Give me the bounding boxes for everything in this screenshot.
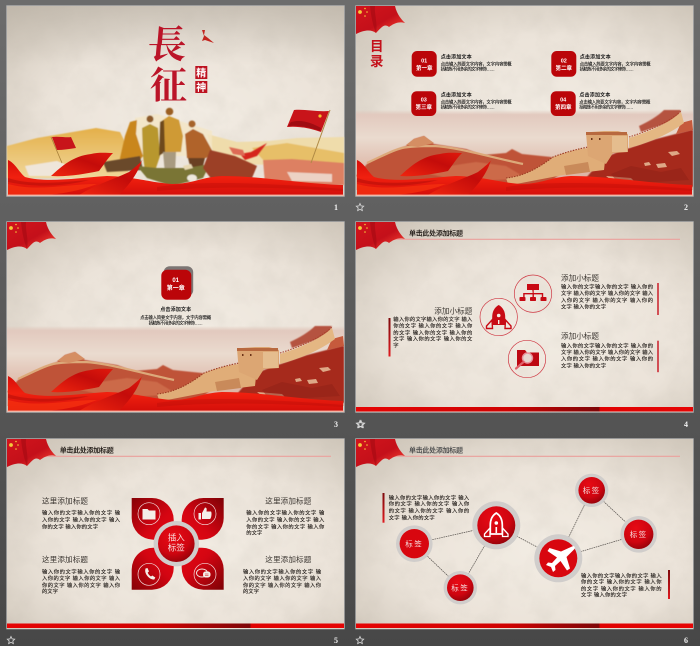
page number 3: 3 (334, 420, 338, 429)
text block: top left (42, 495, 121, 530)
node: label left (396, 525, 433, 562)
chapter 4: 点击输入简要文字内容，文字内容需概 (579, 99, 651, 106)
text block: top left: 这里添加标题 (42, 495, 88, 505)
chapter 3: 括精炼不用多余的文字修饰…… (441, 104, 495, 111)
chapter 4: 括精炼不用多余的文字修饰…… (579, 104, 633, 111)
yellow ink hills (7, 128, 344, 185)
text block: top left: 你的文字 输入你的文字 (42, 522, 98, 530)
slide 3: chapter divider (6, 221, 345, 413)
node: rocket (472, 501, 520, 549)
text block: bottom right (581, 570, 670, 599)
node: label bottom (444, 571, 477, 604)
text block: bottom left: 的文字 (42, 587, 58, 595)
text block: top left: 入你的文字 输入你的文字 输入 (42, 515, 121, 523)
right red flag (287, 110, 330, 163)
page number 4: 4 (684, 420, 688, 429)
title calligraphy (145, 14, 189, 109)
chapter badge: 第一章 (167, 284, 185, 292)
page number 5: 5 (334, 636, 338, 645)
icon: folder (138, 503, 160, 525)
text block: upper right: 入你的文字 输入你的文字 输入你的 (561, 296, 653, 304)
icon: phone (138, 563, 160, 585)
chapter 4: 第四章 (555, 103, 572, 111)
icon: org chart (514, 275, 552, 312)
icon: rocket (480, 298, 517, 336)
text block: left (388, 306, 473, 356)
title calligraphy: 征 (150, 55, 187, 109)
stamp seal: 精 (196, 66, 206, 79)
chapter 1: 01 (421, 58, 427, 64)
bottom bar (356, 624, 693, 628)
page number 2: 2 (684, 203, 688, 212)
chapter text (140, 306, 212, 326)
chapter 1: 点击添加文本 (441, 54, 472, 61)
chapter 2: 括精炼不用多余的文字修饰…… (580, 66, 634, 73)
text block: upper right (561, 273, 659, 315)
text block: bottom right: 你的文字 输入你的文字 输入你 (581, 578, 662, 586)
page number 6: 6 (684, 636, 688, 645)
text block: bottom left: 入你的文字 输入你的文字 输入 (42, 574, 121, 582)
text block: upper right: 输入你的文字输入你的文字 输入你的 (561, 282, 653, 290)
text block: upper right: 文字 输入你的文字 输入你的文字 输入 (561, 289, 654, 297)
center label (154, 521, 199, 566)
text block: top left: 输入你的文字输入你的文字 输入 (389, 494, 470, 502)
stamp seal (195, 66, 207, 94)
text block: top right: 你的文字 输入你的文字 输入你 (246, 522, 325, 530)
slide 6: network diagram (355, 438, 694, 629)
icon: star 3 (357, 420, 365, 428)
text block: lower right (561, 330, 659, 372)
node: label bottom: 标签 (451, 582, 469, 592)
brush mark (202, 30, 214, 43)
chapter 2: 第二章 (556, 64, 573, 72)
center label: 标签 (168, 543, 185, 553)
chapter 2: 02 (561, 58, 567, 64)
dashed connectors (414, 490, 639, 588)
text block: bottom right: 的文字 输入你的文字 输入你的 (581, 584, 662, 592)
center label: 插入 (168, 533, 185, 543)
soldiers painting (103, 108, 267, 186)
text block: left: 输入你的文字输入你的文字 输入 (393, 315, 473, 323)
contents heading (370, 39, 383, 69)
text block: lower right: 添加小标题 (561, 330, 599, 340)
text block: top right: 输入你的文字输入你的文字 输 (246, 509, 325, 517)
slide 4: three points (355, 221, 694, 413)
text block: bottom left: 你的文字 输入你的文字 输入你 (42, 581, 121, 589)
text block: top right: 入你的文字 输入你的文字 输入 (246, 515, 325, 523)
stamp seal: 神 (196, 81, 206, 94)
bottom bar (356, 407, 693, 412)
text block: top left: 输入你的文字输入你的文字 输 (42, 509, 121, 517)
text block: top right: 的文字 (246, 528, 262, 536)
text block: bottom right (243, 554, 322, 595)
node: label left: 标签 (405, 538, 423, 548)
chapter badge (161, 266, 193, 300)
chapter text: 括精炼不用多余的文字修饰…… (149, 319, 203, 326)
text block: upper right: 文字 输入你的文字 (561, 303, 606, 311)
icon: star 4 (356, 420, 364, 428)
node: label top (575, 474, 608, 507)
text block: top left: 的文字 输入你的文字 输入你的 (389, 506, 469, 514)
text block: left: 的文字 输入你的文字 输入你的 (393, 328, 472, 336)
chapter 2: 点击输入简要文字内容，文字内容需概 (580, 61, 651, 68)
chapter 2 (551, 51, 651, 77)
left red flag (51, 137, 76, 163)
chapter text: 点击添加文本 (160, 306, 191, 313)
text block: left: 字 (393, 341, 399, 349)
node: label right (620, 516, 657, 553)
text block: bottom right: 输入你的文字输入你的文字 输入 (581, 571, 662, 579)
text block: top left (382, 493, 470, 523)
text block: bottom left (42, 554, 121, 595)
chapter 2: 点击添加文本 (580, 54, 611, 61)
text block: lower right: 文字 输入你的文字 (561, 361, 606, 369)
text block: lower right: 输入你的文字输入你的文字 输入你的 (561, 341, 653, 349)
chapter text: 点击输入简要文字内容，文字内容需概 (140, 314, 212, 321)
icon: folder and magnifier (508, 340, 546, 378)
contents heading: 目 (370, 39, 383, 54)
text block: left: 添加小标题 (434, 306, 473, 316)
chapter 3: 第三章 (416, 103, 433, 111)
text block: bottom left: 输入你的文字输入你的文字 输 (42, 568, 121, 576)
chapter 3: 03 (421, 97, 427, 103)
icon: chat (194, 563, 216, 585)
text block: bottom left: 这里添加标题 (42, 554, 88, 564)
chapter badge: 01 (172, 278, 180, 284)
icon: star 5 (7, 636, 15, 644)
chapter 4 (551, 91, 651, 116)
text block: left: 你的文字 输入你的文字 输入你 (393, 322, 473, 330)
chapter 1 (412, 51, 512, 77)
bottom bar (7, 624, 344, 628)
text block: bottom right: 文字 输入你的文字 (581, 591, 627, 599)
chapter 4: 04 (560, 97, 567, 103)
icon: thumbs up (194, 503, 216, 525)
text block: top right (246, 495, 325, 536)
text block: bottom right: 输入你的文字输入你的文字 输 (243, 568, 322, 576)
chapter 3 (411, 91, 512, 116)
chapter 1: 第一章 (416, 64, 433, 72)
contents heading: 录 (370, 54, 383, 69)
text block: bottom right: 入你的文字 输入你的文字 输入 (243, 574, 322, 582)
slide title: 单击此处添加标题 (60, 446, 114, 455)
slide title: 单击此处添加标题 (409, 229, 463, 238)
petal diagram (132, 498, 224, 590)
text block: top right: 这里添加标题 (265, 495, 312, 505)
slide 2: contents (355, 5, 694, 197)
chapter 1: 括精炼不用多余的文字修饰…… (441, 66, 495, 73)
text block: top left: 文字 输入你的文字 (389, 513, 435, 521)
chapter 1: 点击输入简要文字内容，文字内容需概 (441, 61, 512, 68)
slide 5: four petals (6, 438, 345, 629)
text block: upper right: 添加小标题 (561, 273, 599, 283)
node: plane (534, 534, 582, 582)
chapter 4: 点击添加文本 (579, 92, 610, 98)
text block: bottom right: 这里添加标题 (265, 554, 312, 564)
text block: lower right: 入你的文字 输入你的文字 输入你的 (561, 355, 653, 363)
node: label right: 标签 (630, 529, 648, 539)
icon: star 6 (356, 636, 364, 644)
page number 1: 1 (334, 203, 338, 212)
chapter 3: 点击输入简要文字内容，文字内容需概 (441, 99, 512, 106)
node: label top: 标签 (583, 485, 601, 495)
icon: star 2 (356, 204, 364, 211)
title calligraphy: 長 (145, 14, 189, 70)
text block: lower right: 文字 输入你的文字 输入你的文字 输入 (561, 348, 654, 356)
text block: bottom right: 的文字 (243, 587, 259, 595)
chapter 3: 点击添加文本 (441, 92, 472, 98)
slide title: 单击此处添加标题 (409, 446, 463, 455)
text block: left: 文字 输入你的文字 输入你的文 (393, 334, 473, 342)
text block: bottom right: 你的文字 输入你的文字 输入你 (243, 581, 322, 589)
text block: top left: 你的文字 输入你的文字 输入你 (389, 500, 470, 508)
slide 1: cover (6, 5, 345, 197)
